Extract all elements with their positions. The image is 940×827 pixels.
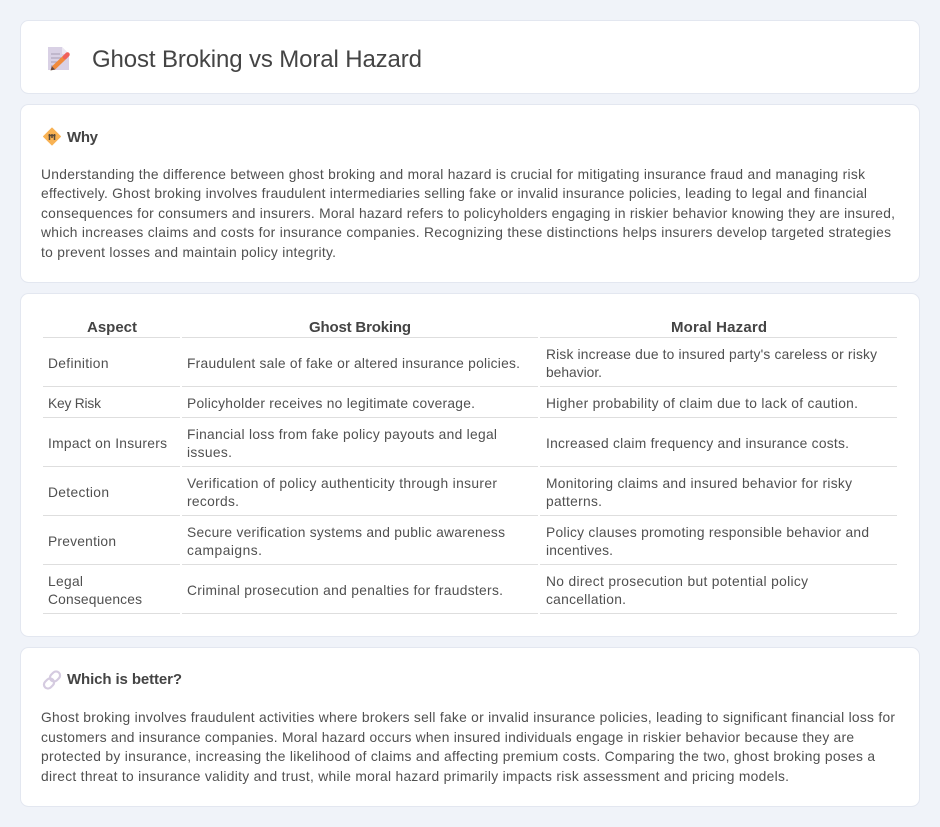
heading: which is better: Which is better? [67,671,182,688]
row: impact on insurers: issues. [187,445,232,460]
row: detection: Monitoring claims and insured behavior for risky [546,476,852,491]
row: prevention: Policy clauses promoting responsible behavior and [546,525,869,540]
row: detection: patterns. [546,494,602,509]
panel: title header [20,20,920,94]
which is better paragraph: customers and insurance companies. Moral hazard occurs when insured individuals engage in riskier behavior because they are [41,730,854,745]
panel: comparison table [20,294,920,636]
which is better paragraph: direct threat to insurance validity and trust, while moral hazard primarily impacts risk assessment and pricing models. [41,769,789,784]
why paragraph: consequences for consumers and insurers. Moral hazard refers to policyholders engaging in riskier behavior knowing they are insured, [41,206,895,221]
row: legal consequences: No direct prosecution but potential policy [546,574,808,589]
why paragraph [40,167,895,260]
row: key risk: Higher probability of claim due to lack of caution. [546,396,858,411]
table header row [87,319,767,336]
row: prevention: incentives. [546,543,613,558]
row: definition: Definition [48,356,108,371]
icon: chain link [42,670,62,690]
why paragraph: to prevent losses and maintain policy integrity. [41,245,336,260]
why paragraph: effectively. Ghost broking involves fraudulent intermediaries selling fake or invalid insurance policies, leading to legal and financial [41,186,867,201]
row: impact on insurers: Increased claim frequency and insurance costs. [546,436,849,451]
row: legal consequences: cancellation. [546,592,626,607]
which is better paragraph: Ghost broking involves fraudulent activities where brokers sell fake or invalid insurance policies, leading to significant financial loss for [41,710,895,725]
row: detection [48,476,852,509]
row: prevention [48,525,869,558]
row: detection: Verification of policy authenticity through insurer [187,476,497,491]
row: legal consequences: Legal [48,574,83,589]
icon: document with pencil [48,47,69,70]
panel: which is better [20,648,920,806]
row: impact on insurers [48,427,849,460]
row: legal consequences: Criminal prosecution and penalties for fraudsters. [187,583,503,598]
row: definition: Risk increase due to insured party's careless or risky [546,347,877,362]
row: detection: Detection [48,485,109,500]
row: detection: records. [187,494,239,509]
row: prevention: campaigns. [187,543,262,558]
row: impact on insurers: Financial loss from fake policy payouts and legal [187,427,497,442]
icon: warning diamond [44,128,60,145]
row: definition [48,347,877,380]
row: prevention: Prevention [48,534,116,549]
why paragraph: Understanding the difference between ghost broking and moral hazard is crucial for mitigating insurance fraud and managing risk [41,167,865,182]
row: definition: behavior. [546,365,602,380]
title: Ghost Broking vs Moral Hazard [92,46,422,73]
row: legal consequences [48,574,808,607]
row: key risk: Key Risk [48,396,101,411]
row: key risk: Policyholder receives no legitimate coverage. [187,396,475,411]
panel: why [20,104,920,282]
row: impact on insurers: Impact on Insurers [48,436,167,451]
why paragraph: which increases claims and costs for insurance companies. Recognizing these distinctions helps insurers develop targeted strategies [40,225,891,240]
which is better paragraph: protected by insurance, increasing the likelihood of claims and affecting premium costs. Comparing the two, ghost broking poses a [41,749,875,764]
heading: why: Why [67,129,99,146]
row: definition: Fraudulent sale of fake or altered insurance policies. [187,356,520,371]
row: prevention: Secure verification systems and public awareness [187,525,505,540]
table header row: Aspect [87,319,137,336]
row: key risk [48,396,858,411]
table header row: Ghost Broking [309,319,411,336]
row: legal consequences: Consequences [48,592,142,607]
table header row: Moral Hazard [671,319,767,336]
which is better paragraph [41,710,895,784]
